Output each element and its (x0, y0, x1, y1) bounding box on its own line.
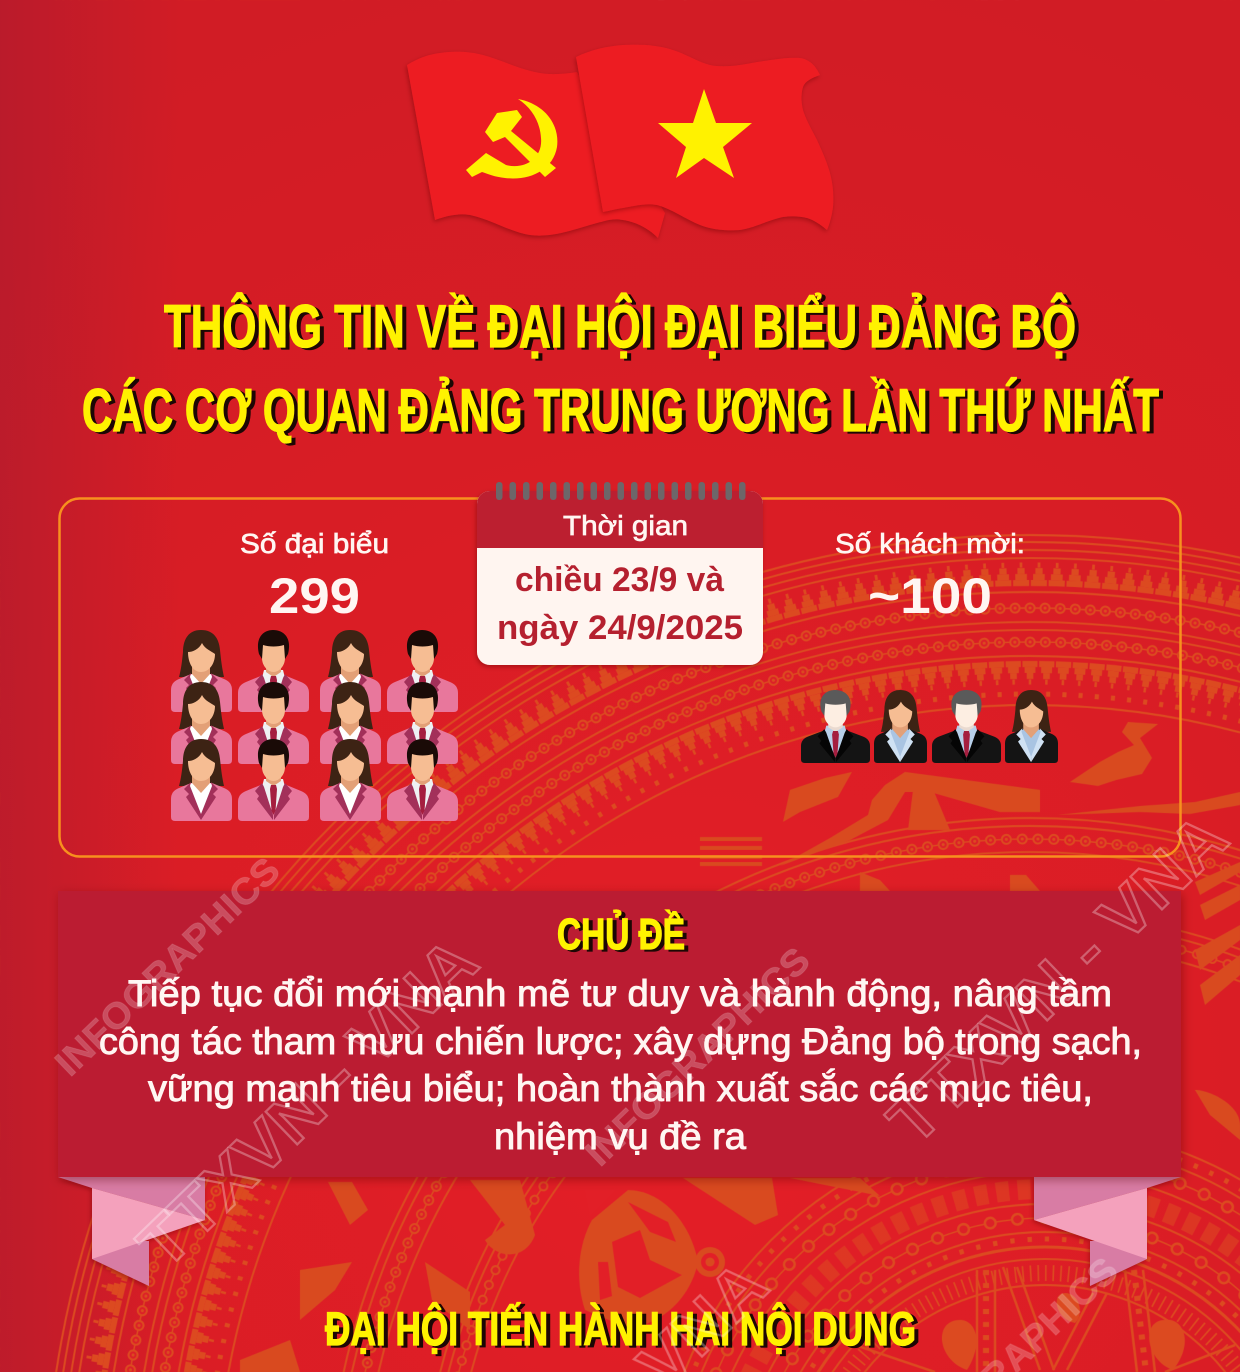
ribbon: right fold (1034, 1177, 1181, 1286)
guests count (835, 528, 1025, 624)
theme body text: nhiệm vụ đề ra (494, 1116, 746, 1157)
ribbon: left fold (58, 1177, 205, 1286)
national flag (576, 45, 833, 230)
delegates count: 299 (269, 568, 360, 624)
star (658, 89, 752, 178)
calendar: time: Thời gian (563, 510, 688, 541)
theme body text: Tiếp tục đổi mới mạnh mẽ tư duy và hành động, nâng tầm (128, 973, 1112, 1014)
delegates count (240, 528, 389, 624)
theme body text: vững mạnh tiêu biểu; hoàn thành xuất sắc các mục tiêu, (148, 1068, 1093, 1109)
calendar: time: ngày 24/9/2025 (497, 609, 743, 647)
flags (407, 45, 833, 238)
calendar: time: chiều 23/9 và (515, 561, 724, 599)
theme body text (99, 973, 1142, 1157)
watermarks: INFOGRAPHICS (577, 939, 818, 1174)
icon: delegates group (171, 630, 458, 821)
theme body text: công tác tham mưu chiến lược; xây dựng Đảng bộ trong sạch, (99, 1021, 1142, 1062)
guests count: Số khách mời: (835, 528, 1025, 559)
guests count: ~100 (868, 568, 992, 624)
theme heading: CHỦ ĐỀ (557, 908, 685, 959)
panel: statistics (60, 498, 1180, 856)
watermarks: TTXVN - VNA (873, 799, 1240, 1158)
icon: guests group (801, 690, 1058, 763)
calendar rings (496, 482, 746, 500)
section heading: ĐẠI HỘI TIẾN HÀNH HAI NỘI DUNG (325, 1302, 916, 1355)
hammer and sickle (466, 99, 557, 178)
title (82, 293, 1159, 444)
delegates count: Số đại biểu (240, 528, 389, 559)
panel: theme (58, 891, 1181, 1177)
calendar: time (477, 482, 763, 665)
party flag (407, 52, 665, 238)
watermarks: TTXVN - VNA (123, 923, 491, 1282)
watermarks: INFOGRAPHICS (47, 849, 288, 1084)
